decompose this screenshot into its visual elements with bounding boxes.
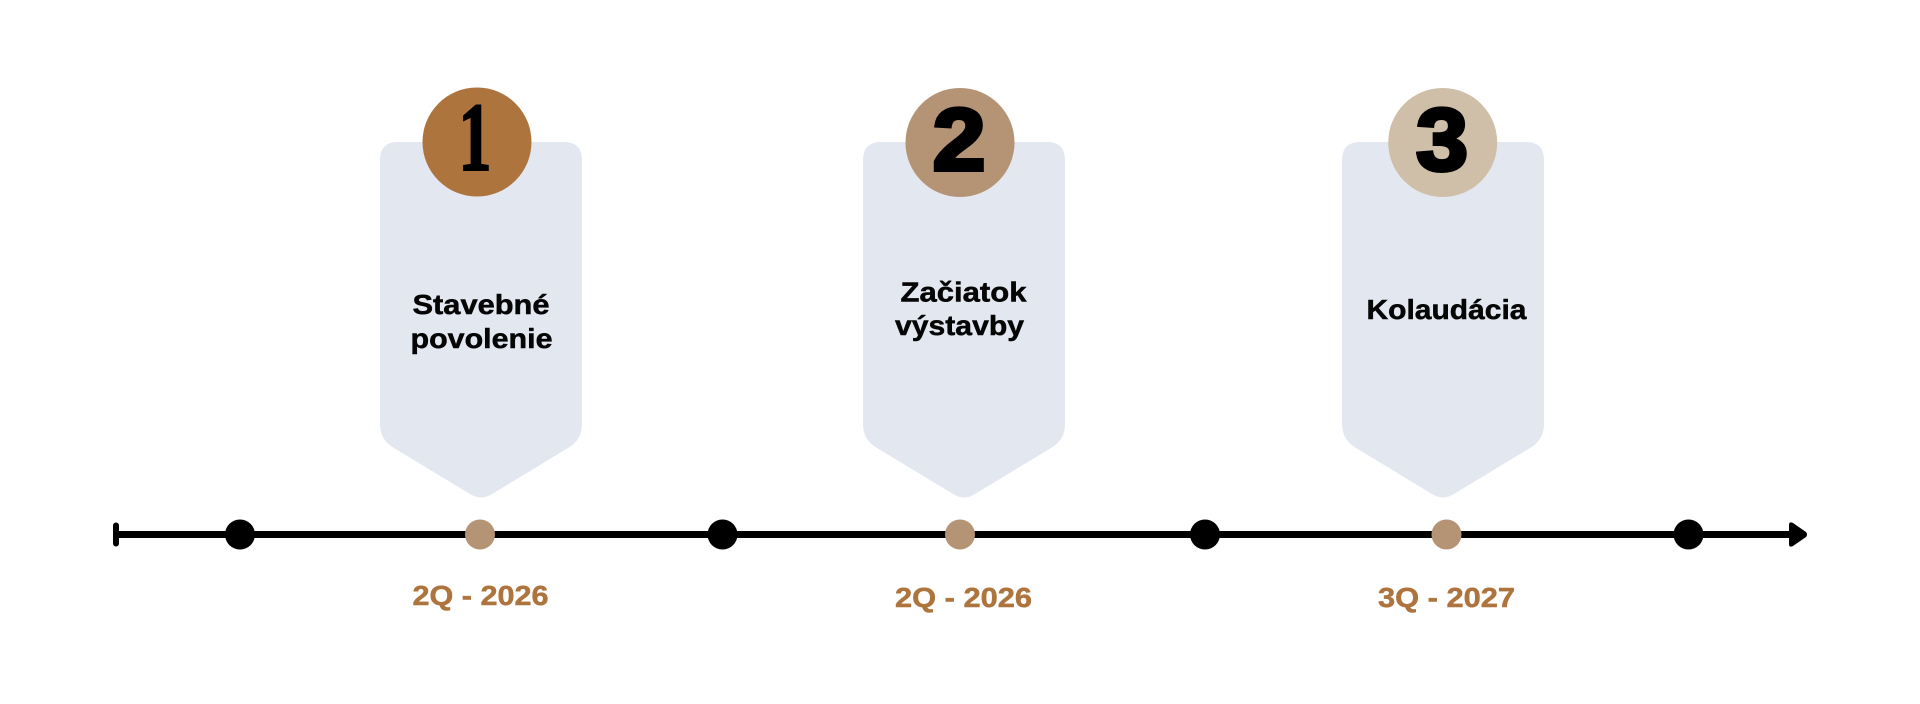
label: Kolaudácia: Kolaudácia: [1366, 294, 1527, 325]
label: Stavebné povolenie: [410, 289, 552, 354]
panel shape: step 1: [380, 142, 582, 498]
label: Stavebné povolenie: Stavebné: [412, 289, 550, 320]
number badge: 3: [1388, 88, 1497, 197]
label: Začiatok výstavby: Začiatok: [900, 276, 1027, 308]
panel shape: step 2: [863, 142, 1065, 498]
label: Stavebné povolenie: povolenie: [410, 323, 552, 354]
number badge: 2: [906, 88, 1014, 197]
number badge: 1: 1: [459, 83, 491, 191]
number badge: 1: [422, 83, 532, 196]
number badge: 3: 3: [1416, 91, 1468, 189]
label: Začiatok výstavby: výstavby: [895, 310, 1024, 341]
timeline markers: [225, 520, 1704, 550]
date: step 2: 2Q - 2026: [895, 582, 1032, 613]
panel: step 1: [380, 83, 582, 497]
timeline axis with arrow: [113, 522, 1807, 547]
panel: step 2: [863, 88, 1065, 498]
panel shape: step 3: [1342, 142, 1544, 498]
date: step 1: 2Q - 2026: [412, 580, 548, 611]
date: step 3: 3Q - 2027: [1378, 582, 1515, 613]
panel: step 3: [1342, 88, 1544, 498]
label: Začiatok výstavby: [895, 276, 1027, 341]
number badge: 2: 2: [933, 91, 985, 189]
